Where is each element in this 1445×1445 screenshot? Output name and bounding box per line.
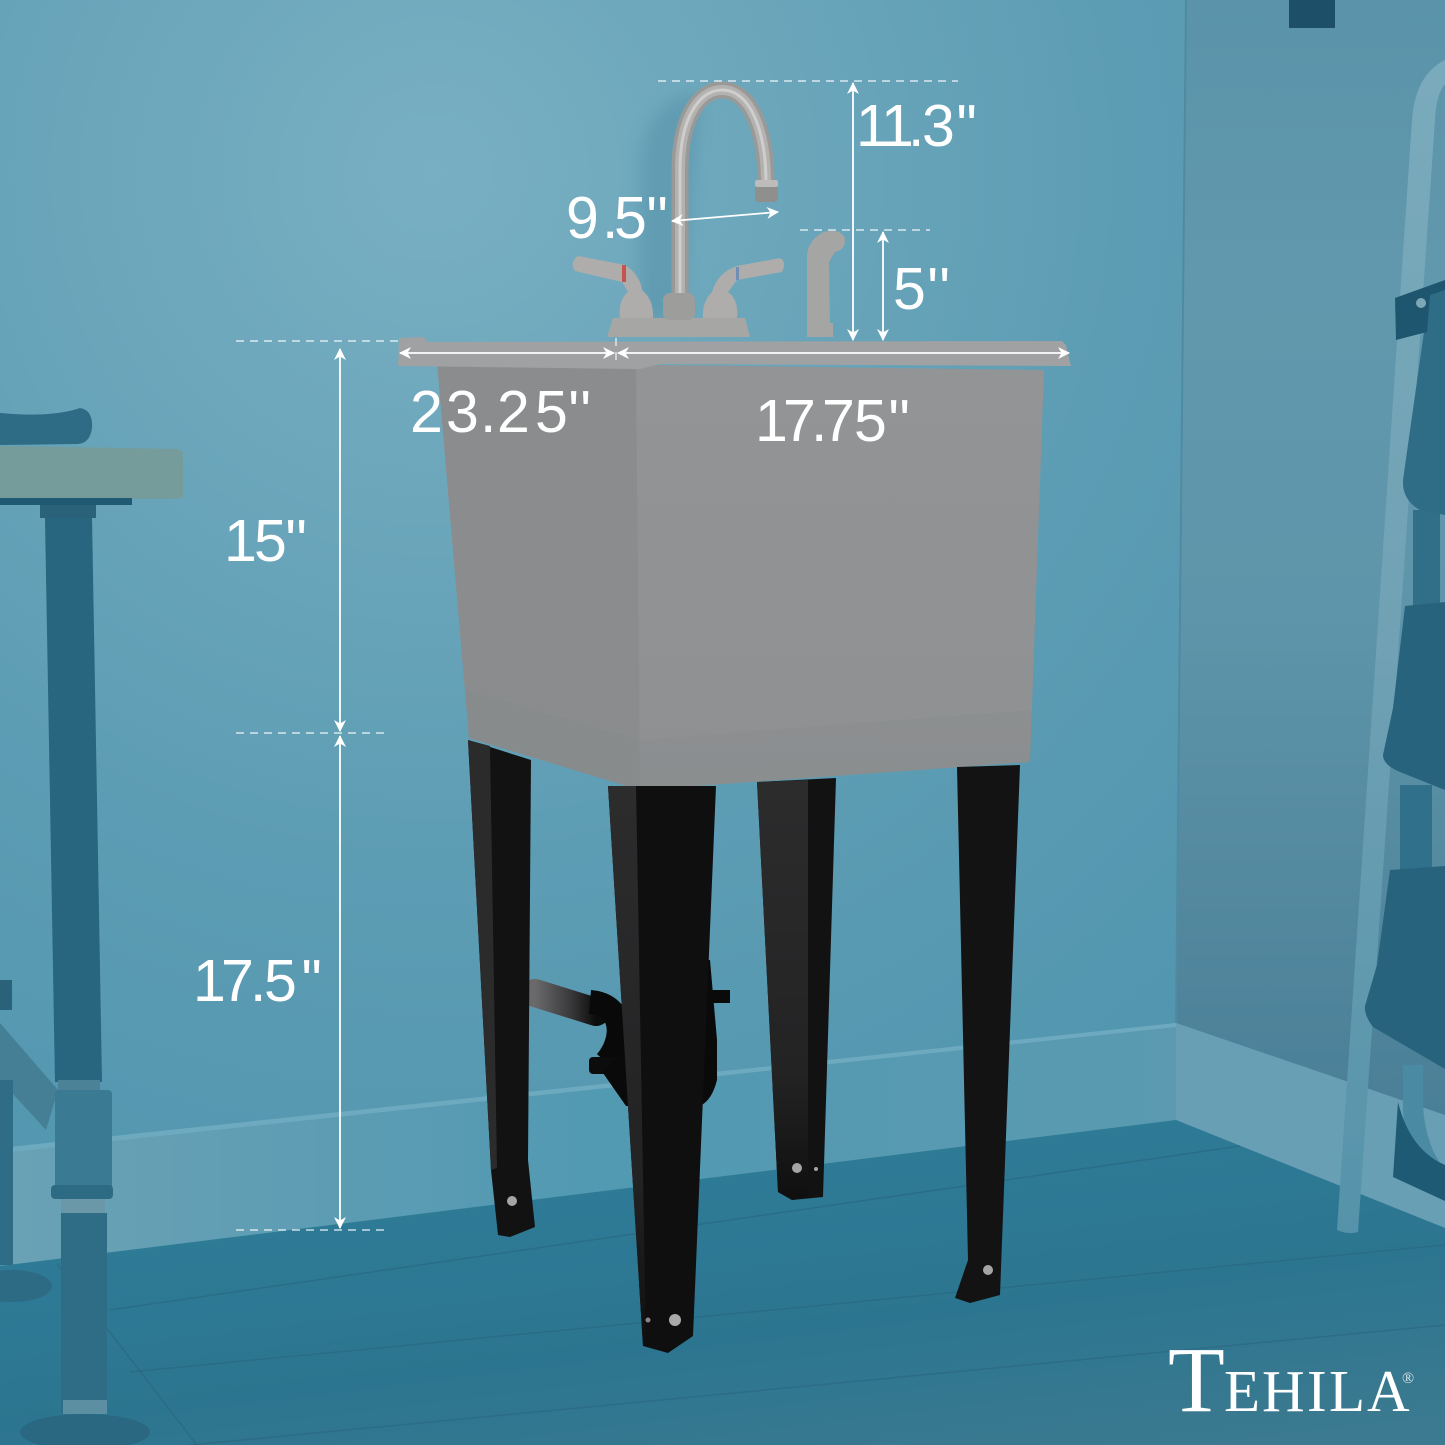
brand logo [1168,1329,1414,1432]
dimension guide lines [236,81,958,1230]
towel [0,408,92,445]
faucet [573,90,845,337]
brand logo: T [1168,1329,1225,1432]
brand logo: EHILA [1224,1358,1410,1424]
sink drain pipe [535,960,730,1108]
sink rim [398,337,1071,369]
dimension arrows [340,83,1069,1228]
label: width 17.75 in: 17.75'' [755,388,910,454]
label: faucet height 11.3 in: 11.3'' [856,93,977,159]
spout [680,90,766,295]
floor [0,1120,1445,1445]
faucet deck plate [607,318,750,337]
label: faucet reach 9.5 in: 9.5'' [566,185,668,251]
left handle [573,256,653,318]
brand logo: ® [1402,1370,1414,1387]
right step ladder [1289,0,1445,1233]
sink tub [398,337,1071,790]
sprayer [807,231,845,337]
label: tub height 15 in: 15'' [224,508,307,574]
baseboard [10,1023,1445,1265]
wall shadow of faucet [640,94,700,320]
label: sprayer height 5 in: 5'' [893,256,950,322]
sink back legs [468,740,836,1237]
label: depth 23.25 in: 23.25'' [410,379,591,445]
sink front legs [608,765,1020,1353]
right handle [703,258,784,318]
left stool with pipe legs [0,408,183,1445]
label: leg height 17.5 in: 17.5'' [193,948,322,1014]
stool board [0,446,183,499]
